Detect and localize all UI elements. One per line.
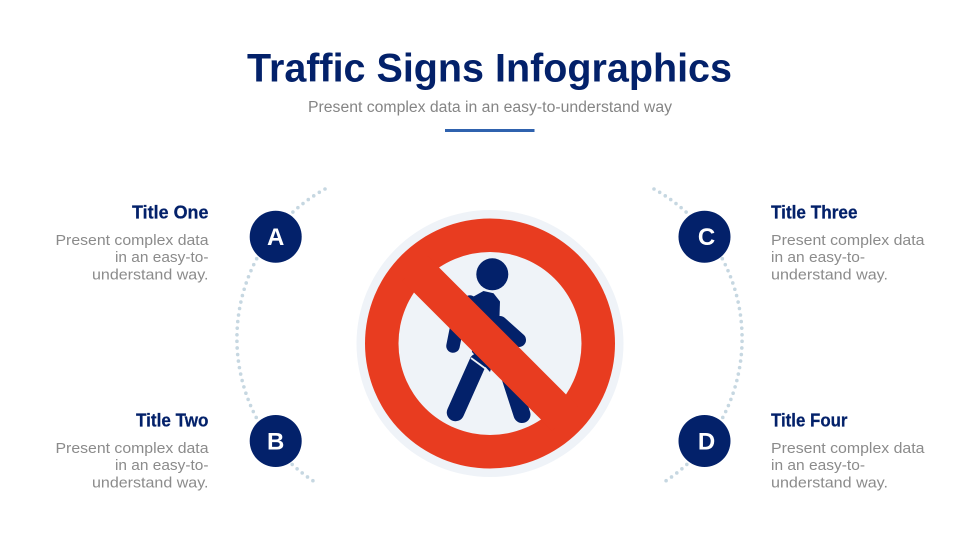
- sign diagonal bar: [415, 268, 565, 418]
- text block: title three: Title Three: [771, 202, 858, 222]
- title: Traffic Signs Infographics: [247, 46, 732, 90]
- icon: pedestrian: [453, 258, 522, 414]
- text block: title one: Present complex data: [56, 232, 209, 249]
- sign red circle: [365, 218, 615, 468]
- badge C: [678, 211, 730, 263]
- text block: title three: Present complex data: [771, 232, 925, 249]
- text block: title four: Title Four: [771, 410, 848, 430]
- sign inner field: [398, 252, 582, 435]
- text block: title two: [56, 410, 209, 492]
- text block: title one: [56, 202, 209, 284]
- badge A: [250, 211, 302, 263]
- no pedestrians sign: [356, 210, 624, 477]
- badge A: A: [267, 224, 284, 251]
- text block: title three: in an easy-to-: [771, 249, 865, 266]
- badge B: [250, 415, 302, 467]
- subtitle: Present complex data in an easy-to-understand way: [308, 99, 672, 116]
- text block: title two: in an easy-to-: [115, 457, 208, 474]
- text block: title two: Present complex data: [56, 440, 209, 457]
- title underline: [445, 129, 534, 132]
- dotted arc: left: [237, 189, 325, 484]
- text block: title one: Title One: [132, 202, 208, 222]
- dotted arc: right: [654, 189, 742, 484]
- badge B: B: [267, 428, 284, 456]
- text block: title three: understand way.: [771, 266, 888, 284]
- text block: title four: Present complex data: [771, 440, 925, 457]
- text block: title four: understand way.: [771, 474, 888, 492]
- text block: title two: understand way.: [92, 474, 208, 492]
- sign outer ring: [356, 210, 624, 477]
- text block: title four: [771, 410, 925, 492]
- text block: title three: [771, 202, 925, 284]
- text block: title one: in an easy-to-: [115, 249, 208, 266]
- text block: title one: understand way.: [92, 266, 208, 284]
- text block: title two: Title Two: [136, 410, 208, 430]
- text block: title four: in an easy-to-: [771, 457, 865, 474]
- badge D: [678, 415, 730, 467]
- badge D: D: [698, 428, 715, 456]
- badge C: C: [698, 224, 715, 251]
